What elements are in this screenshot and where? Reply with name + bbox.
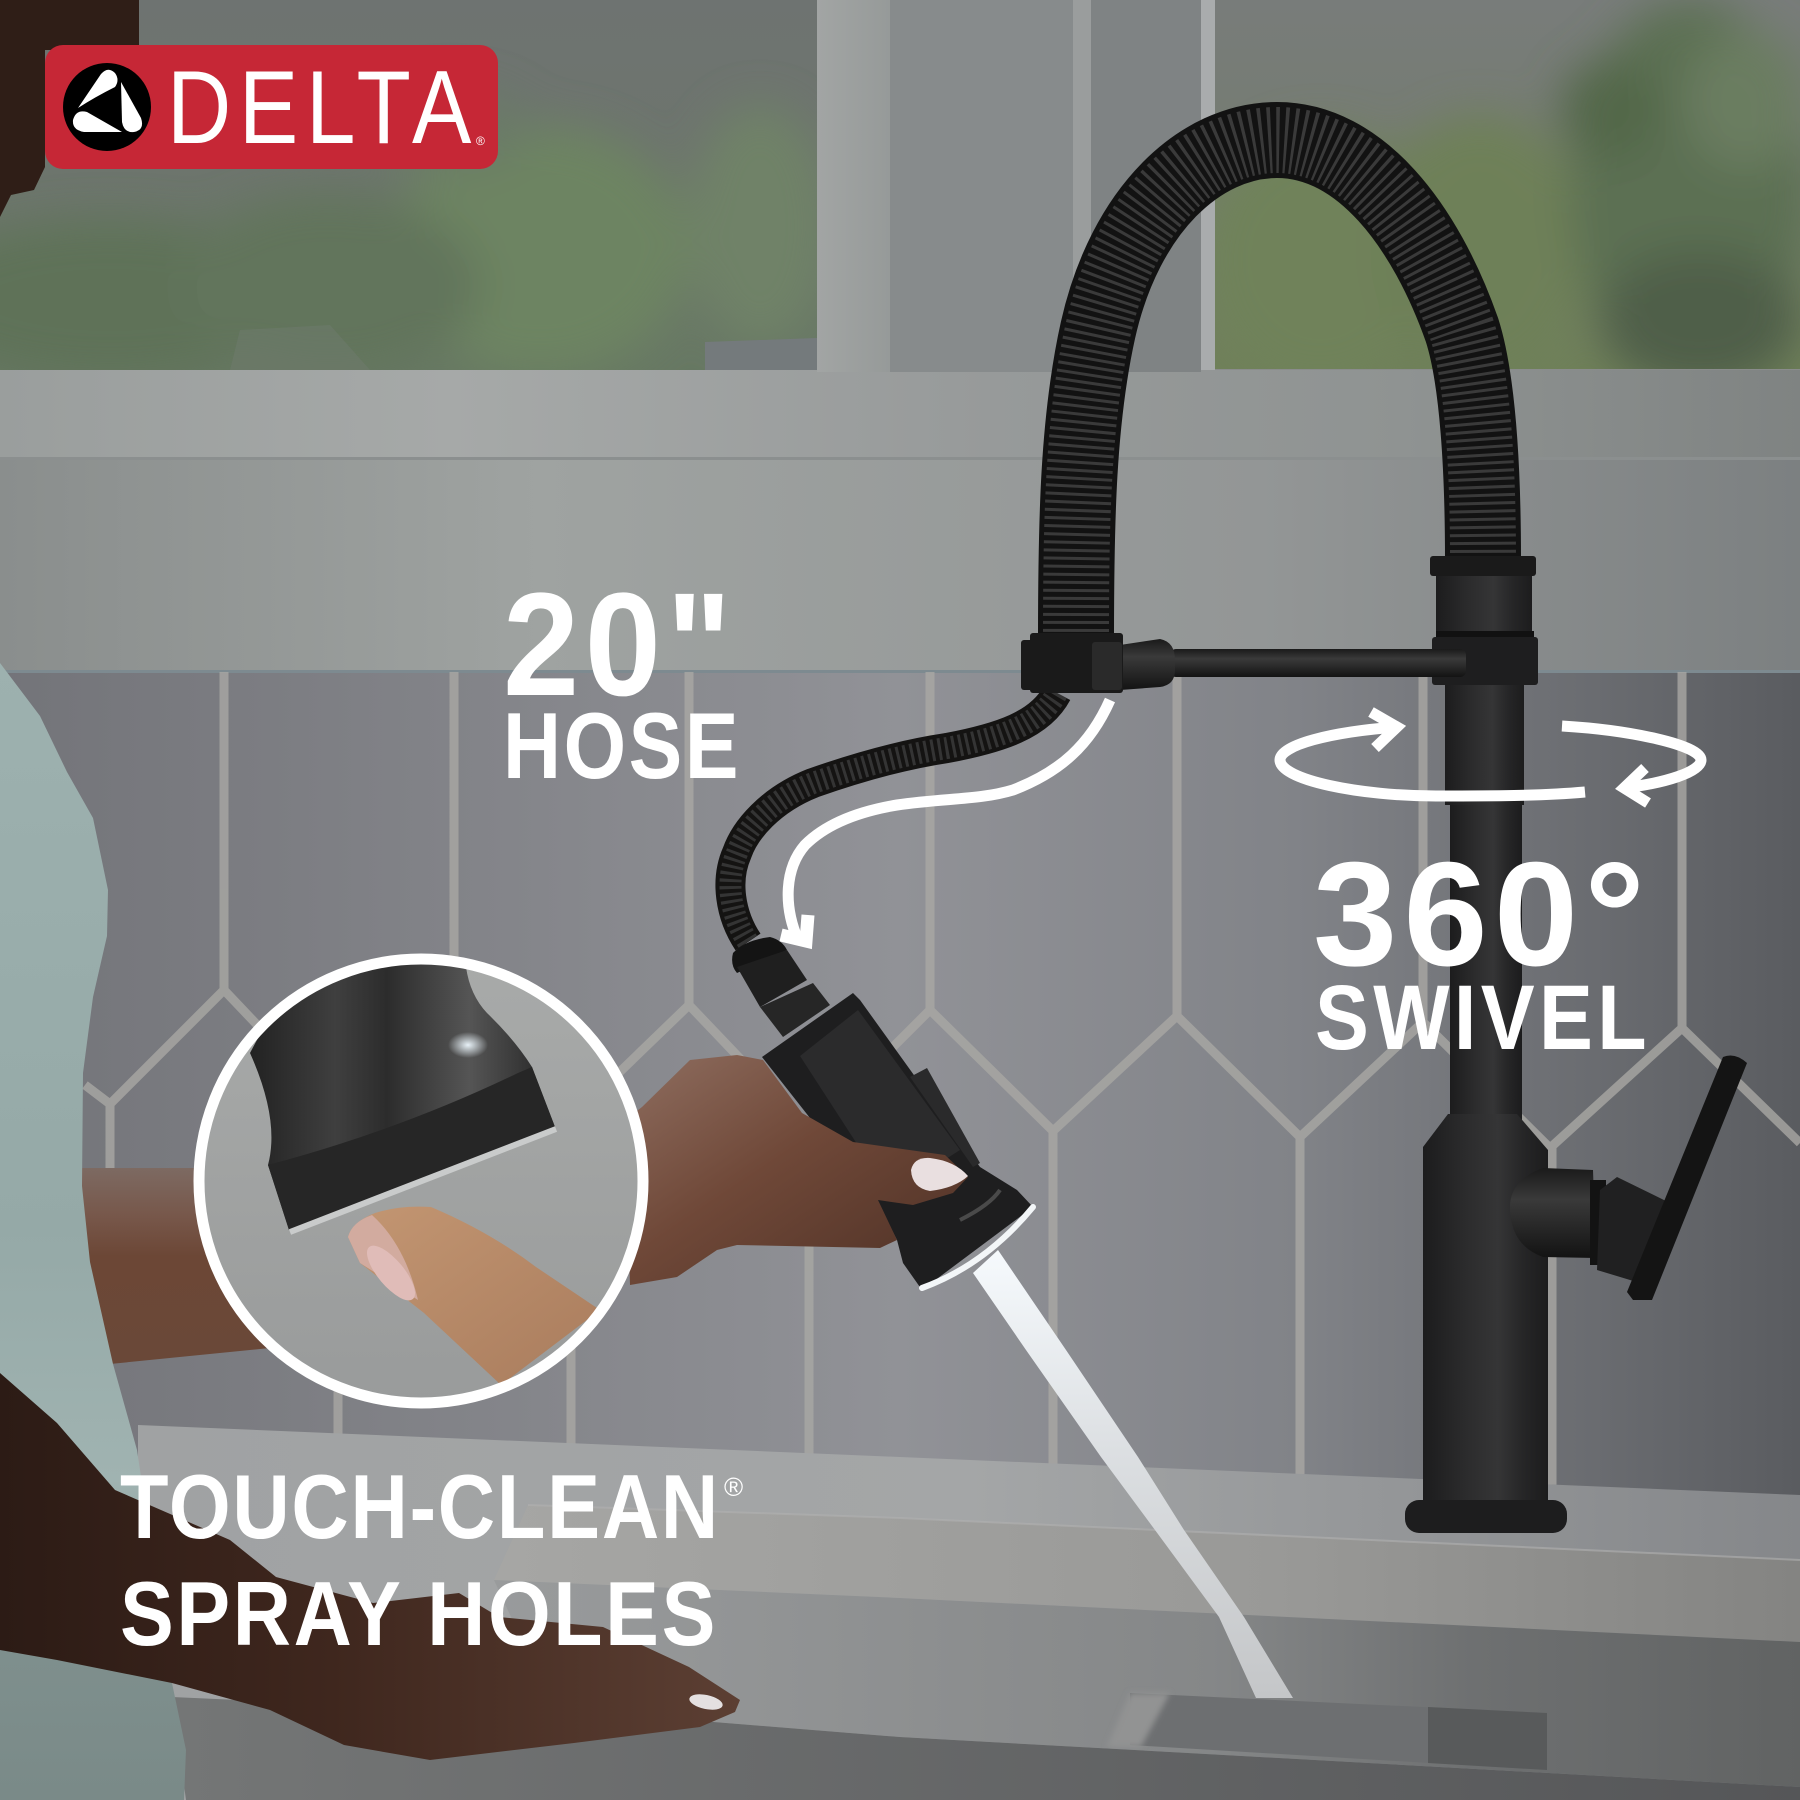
right window xyxy=(1200,0,1800,390)
collar xyxy=(1430,556,1538,685)
hand holding sprayer xyxy=(625,1055,968,1285)
person: upper forearm xyxy=(80,1168,300,1364)
arrow: hose length xyxy=(781,700,1110,941)
counter front face xyxy=(494,1505,1800,1642)
coiled spring spout xyxy=(1076,140,1483,640)
sprayer light ring xyxy=(922,1207,1033,1288)
sprayer button xyxy=(910,1068,980,1167)
water stream xyxy=(973,1250,1293,1698)
person: face xyxy=(0,0,139,217)
elbow joint xyxy=(1120,639,1175,690)
heading: 20 inch hose xyxy=(503,563,741,798)
thumb xyxy=(348,1207,600,1385)
braided hose xyxy=(730,693,1057,942)
Delta logo xyxy=(45,45,498,169)
faucet body xyxy=(1423,1114,1548,1505)
base plate xyxy=(1405,1500,1567,1533)
nails xyxy=(688,1692,724,1712)
person: shirt xyxy=(0,663,186,1800)
left window xyxy=(0,0,830,380)
Delta logo: ® xyxy=(476,134,485,148)
sprayer knurled neck xyxy=(737,950,830,1037)
sink front rim xyxy=(172,1697,1800,1800)
heading: 20 inch hose: HOSE xyxy=(503,693,741,798)
heading: touch-clean spray holes: SPRAY HOLES xyxy=(120,1564,718,1665)
heading: touch-clean spray holes xyxy=(120,1457,743,1665)
horizontal arm xyxy=(1170,649,1466,677)
faucet xyxy=(730,140,1747,1533)
person: lower arm and hand on counter xyxy=(0,1373,740,1760)
heading: 360 swivel: SWIVEL xyxy=(1315,967,1651,1069)
sprayer head closeup xyxy=(250,960,556,1232)
heading: touch-clean spray holes: TOUCH-CLEAN xyxy=(120,1457,720,1558)
sink wall xyxy=(494,1580,1800,1787)
tile grout pattern xyxy=(85,672,1800,1500)
fingernail xyxy=(911,1158,968,1191)
sprayer body xyxy=(762,993,1033,1290)
logo wordmark: DELTA xyxy=(167,50,479,166)
countertop and sink xyxy=(138,1425,1800,1800)
right arc xyxy=(1562,726,1701,788)
heading: 360 swivel xyxy=(1313,832,1651,1069)
heading: touch-clean spray holes: ® xyxy=(724,1472,743,1502)
sprayer collar xyxy=(732,937,787,973)
swivel arrows xyxy=(1280,712,1701,803)
left arc xyxy=(1280,727,1585,796)
stem xyxy=(1445,685,1524,805)
distant roofs xyxy=(705,338,817,370)
sink floor reflection xyxy=(1107,1693,1547,1770)
handle xyxy=(1510,1055,1747,1300)
logo emblem xyxy=(63,63,151,151)
sprayer head highlight xyxy=(960,1190,1000,1220)
inset: touch-clean detail circle xyxy=(199,959,643,1403)
counter surface xyxy=(138,1425,1800,1800)
hose clamp xyxy=(1021,633,1123,693)
heading: 360 swivel: 360° xyxy=(1313,832,1651,997)
heading: 20 inch hose: 20" xyxy=(503,563,737,727)
